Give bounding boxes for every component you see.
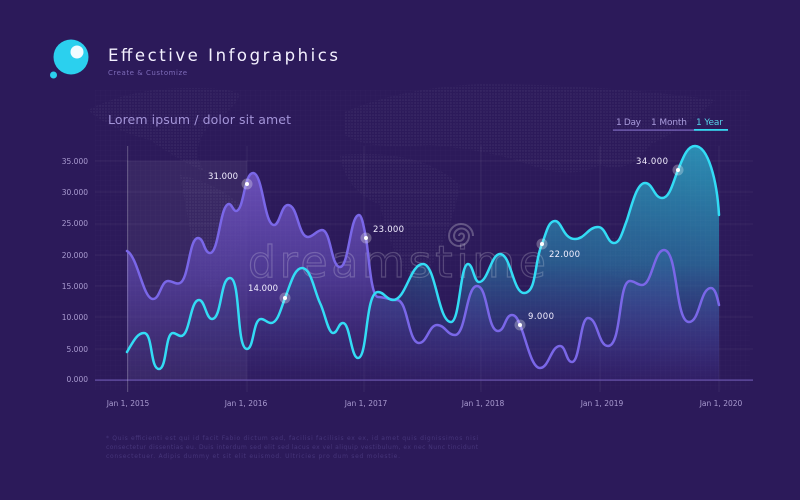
y axis labels: 35.000: [62, 157, 88, 166]
purple series area: [127, 173, 719, 380]
data value labels: 34.000: [636, 157, 668, 167]
data value labels: 22.000: [549, 250, 580, 260]
footnote text: consectetuer. Adipis dummy et sit elit euismod. Ultricies pro dum sed molestie.: [106, 453, 400, 460]
gridlines: [95, 146, 753, 392]
y axis labels: 20.000: [62, 251, 88, 260]
data value labels: [208, 157, 668, 322]
y axis labels: 5.000: [67, 345, 88, 354]
x axis labels: Jan 1, 2015: [106, 399, 150, 408]
cyan series line: [127, 146, 719, 369]
x axis labels: Jan 1, 2018: [461, 399, 505, 408]
fine texture: [95, 90, 750, 390]
data value labels: 14.000: [248, 284, 278, 294]
time range tabs: [613, 118, 728, 131]
data value labels: 31.000: [208, 172, 238, 182]
purple series line: [127, 173, 719, 368]
world map dot pattern: [88, 84, 715, 290]
x axis labels: Jan 1, 2019: [580, 399, 624, 408]
time range tabs: 1 Year: [696, 118, 723, 128]
footnote text: [106, 435, 479, 460]
footnote text: consectetur dissentias eu. Duis interdum sed elit sed lacus ex vel aliquip vestibulum, ex nec Nunc tincidunt: [106, 444, 479, 451]
data markers: [242, 164, 684, 330]
x axis labels: Jan 1, 2017: [344, 399, 388, 408]
x axis labels: [106, 399, 743, 408]
y axis labels: [62, 157, 88, 384]
y axis labels: 10.000: [62, 313, 88, 322]
data value labels: 9.000: [528, 312, 554, 322]
subtitle: Create & Customize: [108, 69, 187, 77]
time range tabs: 1 Month: [651, 118, 687, 128]
y axis labels: 30.000: [62, 188, 88, 197]
data value labels: 23.000: [373, 225, 404, 235]
watermark: dreamstime: [248, 237, 546, 288]
chart heading: Lorem ipsum / dolor sit amet: [108, 112, 291, 127]
y axis labels: 15.000: [62, 282, 88, 291]
highlighted period panel: [127, 161, 247, 380]
cyan series area: [294, 147, 719, 372]
y axis labels: 0.000: [67, 375, 88, 384]
time range tabs: 1 Day: [616, 118, 642, 128]
y axis labels: 25.000: [62, 219, 88, 228]
x axis labels: Jan 1, 2020: [699, 399, 743, 408]
axis lines: [95, 146, 753, 392]
logo icon: [50, 40, 88, 78]
footnote text: * Quis efficienti est qui id facit Fabio dictum sed, facilisi facilisis ex ex, id amet quis dignissimos nisi: [106, 435, 478, 442]
x axis labels: Jan 1, 2016: [224, 399, 268, 408]
chart: [62, 144, 753, 408]
title: Effective Infographics: [108, 46, 338, 65]
